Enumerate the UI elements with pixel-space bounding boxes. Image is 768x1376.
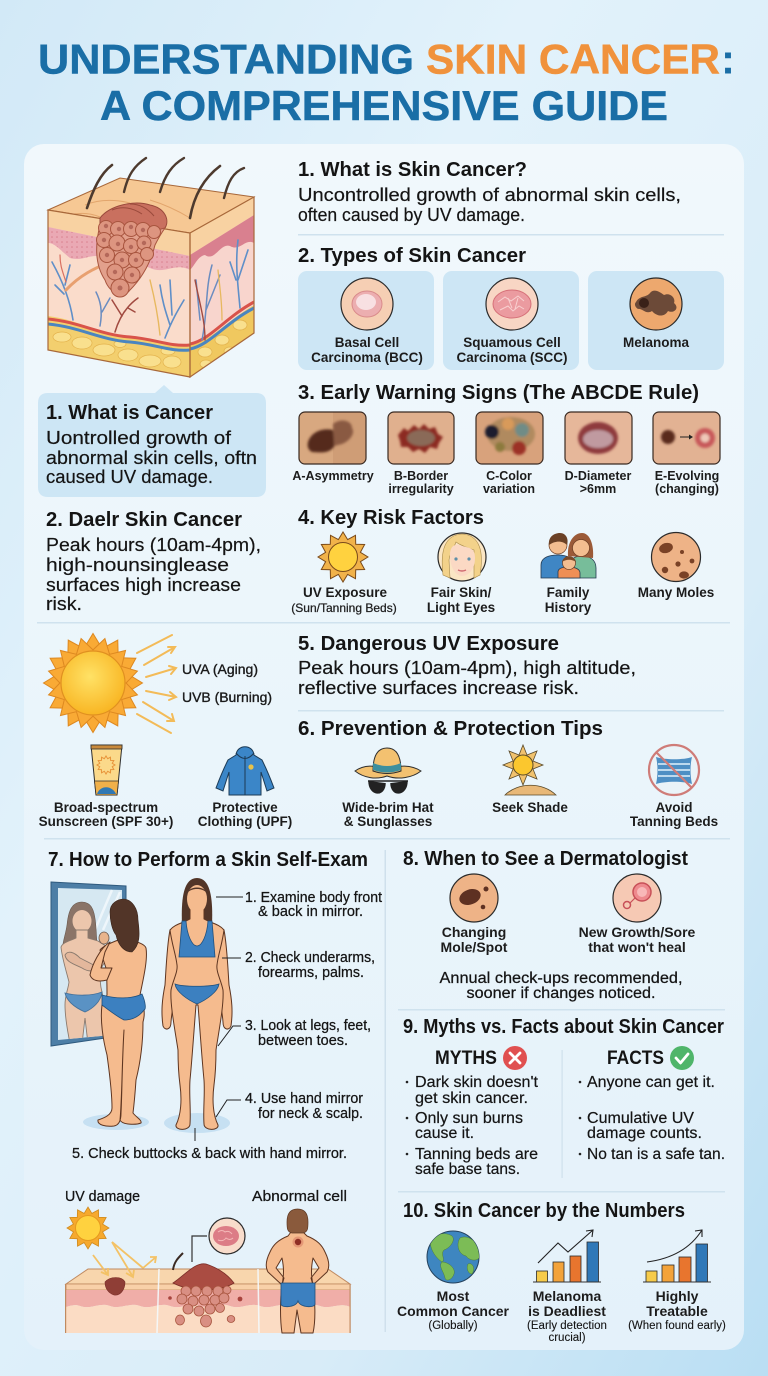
column: myths: get skin cancer. [415, 1090, 528, 1107]
card: squamous cell carcinoma: Squamous Cell [463, 335, 561, 350]
sign: color variation: variation [483, 482, 535, 496]
section 2: types of skin cancer: 2. Types of Skin Cancer [298, 244, 526, 267]
tip: avoid tanning beds: Tanning Beds [630, 814, 718, 829]
card: basal cell carcinoma: Basal Cell [335, 335, 399, 350]
icon: changing mole: Mole/Spot [441, 939, 508, 955]
step labels with leader lines: 5. Check buttocks & back with hand mirror. [72, 1146, 347, 1162]
text block: daelr skin cancer: surfaces high increase [46, 574, 241, 595]
column: facts: Cumulative UV [587, 1110, 695, 1127]
step labels with leader lines: & back in mirror. [258, 904, 363, 920]
column: myths: MYTHS [435, 1048, 497, 1069]
sign: diameter: >6mm [580, 482, 616, 496]
card: squamous cell carcinoma: Carcinoma (SCC) [456, 350, 568, 365]
risk: family history: History [545, 600, 592, 615]
column: myths: Only sun burns [415, 1110, 523, 1127]
bar chart: highly treatable: Highly [656, 1288, 699, 1304]
tip: seek shade: Seek Shade [492, 800, 568, 815]
tip: sunscreen: Sunscreen (SPF 30+) [39, 814, 173, 829]
icon: globe [397, 1231, 510, 1332]
column: facts: damage counts. [587, 1125, 702, 1142]
step labels with leader lines: between toes. [258, 1033, 348, 1049]
text block: daelr skin cancer: 2. Daelr Skin Cancer [46, 508, 242, 531]
section 9: myths vs facts [403, 1015, 725, 1178]
illustration: woman from front [162, 878, 232, 1133]
card: basal cell carcinoma [298, 271, 434, 370]
section 8: when to see a dermatologist: Annual check-ups recommended, [440, 970, 682, 987]
icon: globe: (Globally) [428, 1320, 478, 1332]
section 5: dangerous uv exposure: reflective surfaces increase risk. [298, 677, 579, 698]
section 1: what is skin cancer: often caused by UV damage. [298, 204, 525, 225]
section 7: skin self-exam [48, 848, 382, 1162]
icon: changing mole: Changing [442, 924, 506, 940]
tip: hat and sunglasses: & Sunglasses [344, 814, 432, 829]
sign: evolving [653, 412, 720, 496]
title: A COMPREHENSIVE GUIDE [100, 82, 668, 129]
title: SKIN CANCER [426, 36, 720, 82]
icon: person with mole [266, 1209, 329, 1333]
tip: protective clothing [198, 747, 292, 829]
column: facts: Anyone can get it. [587, 1074, 715, 1091]
bar chart: melanoma is deadliest: (Early detection [527, 1320, 607, 1332]
illustration: skin cross-section [48, 158, 254, 380]
section 5: dangerous uv exposure: 5. Dangerous UV Exposure [298, 632, 559, 655]
icon: tumour cells [96, 203, 167, 297]
skin strip [65, 1269, 351, 1333]
section 4: key risk factors: 4. Key Risk Factors [298, 506, 484, 529]
column: myths: safe base tans. [415, 1161, 520, 1178]
section 6: prevention tips [39, 717, 718, 829]
tip: avoid tanning beds [630, 745, 718, 829]
risk: uv exposure [291, 532, 397, 615]
section 3: ABCDE warning signs [292, 381, 720, 496]
section 8: when to see a dermatologist: 8. When to See a Dermatologist [403, 847, 688, 870]
sign: border irregularity: irregularity [388, 482, 454, 496]
bar chart: melanoma is deadliest: is Deadliest [528, 1303, 606, 1319]
section 5: dangerous uv exposure [298, 632, 636, 698]
icon: globe: Common Cancer [397, 1303, 510, 1319]
section 1: what is skin cancer: Uncontrolled growth of abnormal skin cells, [298, 184, 681, 205]
bar chart: highly treatable [628, 1230, 726, 1332]
icon: new growth [579, 874, 696, 955]
tip: protective clothing: Clothing (UPF) [198, 814, 292, 829]
column: myths: cause it. [415, 1125, 474, 1142]
sign: asymmetry [292, 412, 374, 483]
icon: small sun [67, 1207, 109, 1249]
card: melanoma: Melanoma [623, 335, 689, 350]
tip: seek shade [492, 745, 568, 815]
section 10: by the numbers [397, 1199, 726, 1344]
callout: what is cancer: caused UV damage. [46, 466, 213, 487]
risk: fair skin [427, 533, 495, 615]
risk: family history [541, 533, 596, 615]
callout: what is cancer: 1. What is Cancer [46, 401, 213, 424]
card: melanoma [588, 271, 724, 370]
step labels with leader lines: forearms, palms. [258, 965, 364, 981]
bar chart: melanoma is deadliest: Melanoma [533, 1288, 601, 1304]
step labels with leader lines: 2. Check underarms, [245, 950, 375, 966]
risk: fair skin: Light Eyes [427, 600, 495, 615]
sign: diameter [565, 412, 632, 496]
column: facts: No tan is a safe tan. [587, 1146, 725, 1163]
illustration: UV damage and abnormal cell [65, 1189, 351, 1333]
illustration: mirror [51, 882, 126, 1046]
section 8: when to see a dermatologist: sooner if changes noticed. [466, 985, 656, 1002]
sign: asymmetry: A-Asymmetry [292, 469, 374, 483]
title: UNDERSTANDING [38, 36, 414, 82]
text block: daelr skin cancer: Peak hours (10am-4pm), [46, 534, 261, 555]
column: myths [406, 1046, 539, 1178]
column: myths: Dark skin doesn't [415, 1074, 539, 1091]
column: facts: FACTS [607, 1048, 664, 1069]
step labels with leader lines: 3. Look at legs, feet, [245, 1018, 371, 1034]
icon: tumour cross-section [168, 1253, 242, 1327]
section 9: myths vs facts: 9. Myths vs. Facts about Skin Cancer [403, 1015, 724, 1038]
callout: what is cancer [38, 385, 266, 497]
sign: diameter: D-Diameter [565, 469, 631, 483]
section 7: skin self-exam: 7. How to Perform a Skin Self-Exam [48, 848, 368, 871]
text block: daelr skin cancer: high-nounsinglease [46, 554, 229, 575]
bar chart: melanoma is deadliest [527, 1230, 607, 1344]
section 1: what is skin cancer [298, 158, 681, 225]
risk: many moles: Many Moles [638, 585, 714, 600]
risk: uv exposure: (Sun/Tanning Beds) [291, 601, 397, 615]
step labels with leader lines: 4. Use hand mirror [245, 1091, 363, 1107]
illustration: UV damage and abnormal cell: Abnormal cell [252, 1189, 347, 1205]
risk: family history: Family [547, 585, 590, 600]
arrows: small uv rays [93, 1242, 156, 1277]
tip: hat and sunglasses: Wide-brim Hat [342, 800, 434, 815]
sign: color variation: C-Color [486, 469, 532, 483]
title: : [721, 36, 735, 82]
callout: magnified abnormal cell [192, 1218, 245, 1262]
sign: color variation [476, 412, 543, 496]
bar chart: highly treatable: Treatable [646, 1303, 708, 1319]
callout: what is cancer: abnormal skin cells, oftn [46, 447, 257, 468]
tip: sunscreen [39, 745, 173, 829]
callout: what is cancer: Uontrolled growth of [46, 427, 232, 448]
icon: hairs [87, 158, 244, 218]
step labels with leader lines [72, 890, 382, 1162]
bar chart: melanoma is deadliest: crucial) [548, 1332, 586, 1344]
sign: border irregularity [388, 412, 454, 496]
section 1: what is skin cancer: 1. What is Skin Cancer? [298, 158, 527, 181]
illustration: sun with UV rays: UVB (Burning) [182, 689, 272, 705]
tip: hat and sunglasses [342, 748, 434, 829]
section 2: types of skin cancer [298, 244, 724, 370]
section 5: dangerous uv exposure: Peak hours (10am-4pm), high altitude, [298, 657, 636, 678]
section 10: by the numbers: 10. Skin Cancer by the Numbers [403, 1199, 685, 1222]
illustration: sun with UV rays [37, 627, 272, 739]
icon: new growth: New Growth/Sore [579, 924, 696, 940]
risk: many moles [638, 532, 714, 600]
sign: evolving: E-Evolving [655, 469, 719, 483]
section 4: key risk factors [291, 506, 714, 615]
bar chart: highly treatable: (When found early) [628, 1320, 726, 1332]
illustration: sun with UV rays: UVA (Aging) [182, 661, 258, 677]
sign: evolving: (changing) [655, 482, 719, 496]
column: myths: Tanning beds are [415, 1146, 538, 1163]
section 6: prevention tips: 6. Prevention & Protection Tips [298, 717, 603, 740]
text block: daelr skin cancer: risk. [46, 593, 82, 614]
tip: avoid tanning beds: Avoid [656, 800, 692, 815]
illustration: woman from back [83, 899, 149, 1130]
risk: fair skin: Fair Skin/ [431, 585, 492, 600]
section 8: when to see a dermatologist [403, 847, 696, 1002]
column: facts [579, 1046, 725, 1163]
risk: uv exposure: UV Exposure [303, 585, 388, 600]
icon: new growth: that won't heal [588, 939, 686, 955]
text block: daelr skin cancer [46, 508, 261, 614]
card: squamous cell carcinoma [443, 271, 579, 370]
illustration: UV damage and abnormal cell: UV damage [65, 1189, 140, 1205]
sign: border irregularity: B-Border [394, 469, 448, 483]
tip: protective clothing: Protective [212, 800, 278, 815]
section 3: ABCDE warning signs: 3. Early Warning Signs (The ABCDE Rule) [298, 381, 699, 404]
step labels with leader lines: 1. Examine body front [245, 890, 382, 906]
tip: sunscreen: Broad-spectrum [54, 800, 158, 815]
icon: globe: Most [437, 1288, 470, 1304]
step labels with leader lines: for neck & scalp. [258, 1106, 363, 1122]
icon: changing mole [441, 874, 508, 955]
card: basal cell carcinoma: Carcinoma (BCC) [311, 350, 423, 365]
arrows: UV rays [137, 635, 176, 733]
title [38, 36, 735, 129]
